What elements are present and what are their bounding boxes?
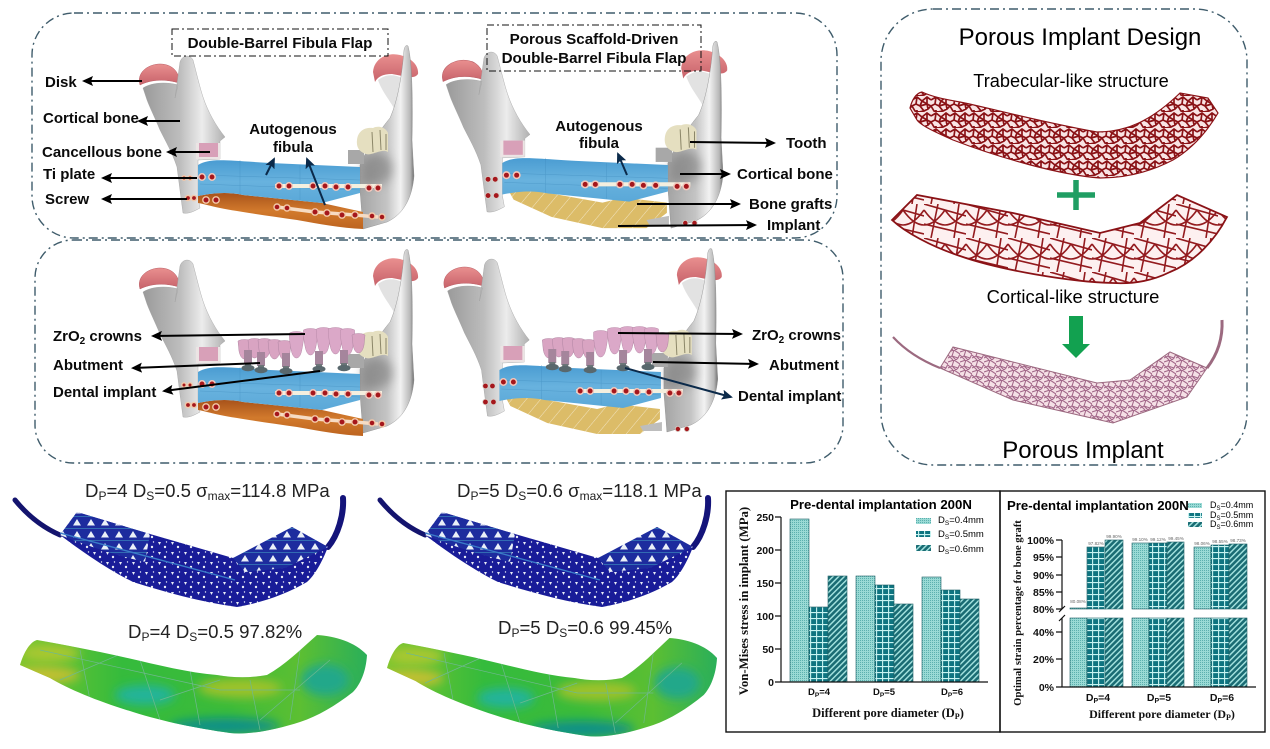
- legend: S: [1216, 525, 1221, 531]
- data labels: [1070, 534, 1246, 604]
- label: strain result DP=5: P: [511, 626, 519, 640]
- legend: D: [938, 544, 945, 555]
- model: strain map DP=4: [10, 630, 371, 738]
- arrows: dental restoration left: [133, 334, 320, 391]
- heading: Porous Implant Design: Porous Implant Design: [959, 24, 1201, 51]
- x tick labels: D: [873, 687, 880, 698]
- lattice: trabecular-like structure: [910, 92, 1218, 178]
- label: stress result DP=4: =0.5 σ: [154, 480, 208, 501]
- chart frame: both bar charts: [726, 491, 1265, 732]
- y tick labels: 0: [768, 677, 774, 689]
- y axis title: Optimal strain percentage for bone graft: [1012, 520, 1024, 706]
- labels: anatomy of scaffold jaw: Implant: [767, 217, 820, 234]
- x tick labels: D: [808, 687, 815, 698]
- legend: S: [945, 549, 950, 556]
- x tick labels: D: [1210, 692, 1217, 704]
- label: stress result DP=5: =5 D: [478, 480, 518, 501]
- heading box: Double-Barrel Fibula Flap: [172, 29, 388, 56]
- labels: dental restoration left: ZrO: [53, 328, 80, 345]
- label: stress result DP=5: =0.6 σ: [526, 480, 580, 501]
- label: stress result DP=4: =4 D: [106, 480, 146, 501]
- data labels: 99.45%: [1168, 536, 1184, 541]
- labels: dental restoration left: crowns: [85, 328, 142, 345]
- arrow: green down arrow: [1062, 316, 1090, 358]
- axes: [1056, 540, 1256, 687]
- legend: =0.5mm: [1221, 510, 1253, 520]
- label: strain result DP=5: =5 D: [519, 617, 559, 638]
- legend: D: [1210, 500, 1216, 510]
- label: strain result DP=4: =0.5 97.82%: [197, 621, 302, 642]
- data labels: 98.73%: [1230, 538, 1246, 543]
- label: stress result DP=5: S: [518, 489, 526, 503]
- label: strain result DP=5: =0.6 99.45%: [567, 617, 672, 638]
- jaw model: porous scaffold flap with dental implants: [444, 248, 722, 434]
- legend: D: [938, 529, 945, 540]
- heading: Porous Implant: Porous Implant: [1002, 437, 1164, 464]
- x tick labels: P: [815, 692, 820, 699]
- label: Cortical-like structure: Cortical-like structure: [987, 286, 1159, 307]
- x tick labels: =4: [1098, 692, 1110, 704]
- panel: flap comparison with dental implants: [35, 240, 843, 463]
- lattice: cortical-like structure: [892, 195, 1227, 283]
- x tick labels: P: [1217, 698, 1222, 705]
- y tick labels: 250: [756, 512, 774, 524]
- labels: anatomy of scaffold jaw: Tooth: [786, 135, 827, 152]
- model: stress map DP=5: [380, 498, 708, 607]
- labels: dental restoration right: Abutment: [769, 357, 839, 374]
- axes: [775, 517, 988, 682]
- icon: plus sign: [1057, 180, 1095, 210]
- y tick labels: 80%: [1033, 604, 1055, 616]
- data labels: 99.90%: [1106, 534, 1122, 539]
- panel: flap comparison before dental implants: [32, 13, 837, 238]
- legend: =0.6mm: [1221, 519, 1253, 529]
- heading box: Porous Scaffold-Driven Double-Barrel Fibula Flap: Porous Scaffold-Driven: [510, 31, 678, 48]
- legend: [916, 515, 984, 556]
- legend: S: [1216, 506, 1221, 512]
- x axis title: Different pore diameter (D: [1089, 707, 1226, 721]
- labels: anatomy of left jaw: Cancellous bone: [42, 144, 162, 161]
- x tick labels: [1086, 692, 1234, 705]
- bars: DP=6: [1194, 544, 1247, 687]
- data labels: 99.12%: [1150, 537, 1166, 542]
- labels: anatomy of left jaw: Autogenous: [249, 121, 337, 138]
- jaw model: double-barrel fibula flap: [139, 45, 418, 229]
- x axis title: P: [955, 712, 960, 721]
- bars: DP=5: [1132, 542, 1184, 687]
- labels: anatomy of left jaw: fibula: [273, 139, 314, 156]
- model: strain map DP=5: [378, 633, 721, 741]
- y tick labels: 40%: [1033, 627, 1055, 639]
- labels: dental restoration left: Dental implant: [53, 384, 156, 401]
- legend: =0.4mm: [1221, 500, 1253, 510]
- y tick labels: 0%: [1039, 682, 1055, 694]
- x axis title: P: [1226, 713, 1231, 722]
- chart title: Pre-dental implantation 200N: [1007, 498, 1189, 513]
- labels: dental restoration left: [53, 328, 156, 401]
- labels: dental restoration left: 2: [80, 336, 86, 347]
- x tick labels: [808, 687, 963, 699]
- heading box: Porous Scaffold-Driven Double-Barrel Fibula Flap: [487, 25, 701, 71]
- y tick labels: 150: [756, 578, 774, 590]
- y tick labels: 200: [756, 545, 774, 557]
- x tick labels: P: [880, 692, 885, 699]
- labels: anatomy of left jaw: Disk: [45, 74, 77, 91]
- bar chart: optimal strain percentage for bone graft: [1007, 498, 1256, 722]
- model: stress map DP=4: [15, 498, 343, 607]
- labels: dental restoration right: ZrO: [752, 327, 779, 344]
- x tick labels: =5: [884, 687, 896, 698]
- x tick labels: D: [1086, 692, 1093, 704]
- chart title: Pre-dental implantation 200N: [790, 497, 972, 512]
- legend: S: [945, 520, 950, 527]
- label: strain result DP=5: S: [559, 626, 567, 640]
- x tick labels: =5: [1159, 692, 1171, 704]
- x axis title: ): [960, 706, 964, 720]
- label: stress result DP=5: D: [457, 480, 470, 501]
- labels: dental restoration right: crowns: [784, 327, 841, 344]
- label: stress result DP=4: P: [98, 489, 106, 503]
- y tick labels: 50: [762, 644, 774, 656]
- labels: dental restoration right: 2: [779, 335, 785, 346]
- label: Trabecular-like structure: Trabecular-like structure: [973, 71, 1169, 91]
- x axis title: Different pore diameter (D: [812, 706, 955, 720]
- bars: DP=4: [1070, 540, 1123, 687]
- legend: =0.6mm: [949, 544, 984, 555]
- labels: anatomy of scaffold jaw: Cortical bone: [737, 166, 833, 183]
- data labels: 80.08%: [1070, 599, 1086, 604]
- label: stress result DP=5: =118.1 MPa: [602, 480, 702, 501]
- label: strain result DP=4: =4 D: [149, 621, 189, 642]
- label: stress result DP=4: D: [85, 480, 98, 501]
- jaw model: porous scaffold-driven flap: [442, 41, 727, 228]
- x tick labels: P: [948, 692, 953, 699]
- x tick labels: D: [1147, 692, 1154, 704]
- labels: anatomy of left jaw: Cortical bone: [43, 110, 139, 127]
- legend: S: [1216, 516, 1221, 522]
- legend: D: [1210, 510, 1216, 520]
- y tick labels: 20%: [1033, 654, 1055, 666]
- labels: dental restoration right: [738, 327, 841, 405]
- label: stress result DP=4: S: [146, 489, 154, 503]
- legend: S: [945, 534, 950, 541]
- labels: dental restoration right: Dental implant: [738, 388, 841, 405]
- arrows: anatomy of scaffold jaw: [618, 142, 774, 226]
- legend: =0.5mm: [949, 529, 984, 540]
- y tick labels: 95%: [1033, 552, 1055, 564]
- legend: D: [938, 515, 945, 526]
- x tick labels: =6: [1222, 692, 1234, 704]
- label: strain result DP=4: D: [128, 621, 141, 642]
- y tick labels: [1027, 535, 1055, 694]
- x tick labels: =4: [819, 687, 831, 698]
- data labels: 97.82%: [1088, 541, 1104, 546]
- arrows: anatomy of left jaw: [84, 81, 325, 205]
- arrows: dental restoration right: [618, 333, 757, 397]
- label: stress result DP=4: max: [208, 489, 230, 503]
- heading box: Porous Scaffold-Driven Double-Barrel Fibula Flap: Double-Barrel Fibula Flap: [502, 50, 686, 67]
- legend: [1188, 500, 1253, 531]
- lattice: porous implant: [893, 320, 1222, 423]
- labels: anatomy of scaffold jaw: [555, 118, 833, 234]
- label: strain result DP=4: P: [141, 630, 149, 644]
- x tick labels: =6: [952, 687, 963, 698]
- labels: anatomy of left jaw: [42, 74, 337, 208]
- labels: anatomy of scaffold jaw: Autogenous: [555, 118, 643, 135]
- bar chart: Von-Mises stress in implant: [737, 497, 988, 721]
- legend: D: [1210, 519, 1216, 529]
- data labels: 99.10%: [1132, 537, 1148, 542]
- legend: =0.4mm: [949, 515, 984, 526]
- y tick labels: 100: [756, 611, 774, 623]
- labels: anatomy of left jaw: Ti plate: [43, 166, 95, 183]
- heading box: Double-Barrel Fibula Flap: Double-Barrel Fibula Flap: [188, 35, 372, 52]
- bars: DP=6: [922, 577, 979, 682]
- labels: anatomy of scaffold jaw: Bone grafts: [749, 196, 832, 213]
- data labels: 98.55%: [1212, 539, 1228, 544]
- label: stress result DP=5: P: [470, 489, 478, 503]
- labels: dental restoration left: Abutment: [53, 357, 123, 374]
- x tick labels: P: [1093, 698, 1098, 705]
- label: stress result DP=4: =114.8 MPa: [230, 480, 330, 501]
- y tick labels: [756, 512, 774, 689]
- jaw model: fibula flap with dental implants: [139, 249, 418, 436]
- y tick labels: 90%: [1033, 570, 1055, 582]
- x tick labels: D: [941, 687, 948, 698]
- x tick labels: P: [1154, 698, 1159, 705]
- data labels: 98.06%: [1194, 541, 1210, 546]
- y axis title: Von-Mises stress in implant (MPa): [737, 507, 751, 695]
- bars: DP=4: [790, 519, 847, 682]
- panel: porous implant design: [881, 9, 1247, 465]
- labels: anatomy of scaffold jaw: fibula: [579, 135, 620, 152]
- x axis title: ): [1231, 707, 1235, 721]
- labels: anatomy of left jaw: Screw: [45, 191, 90, 208]
- label: strain result DP=5: D: [498, 617, 511, 638]
- y tick labels: 100%: [1027, 535, 1055, 547]
- bars: DP=5: [856, 576, 913, 682]
- label: strain result DP=4: S: [189, 630, 197, 644]
- label: stress result DP=5: max: [580, 489, 602, 503]
- y tick labels: 85%: [1033, 587, 1055, 599]
